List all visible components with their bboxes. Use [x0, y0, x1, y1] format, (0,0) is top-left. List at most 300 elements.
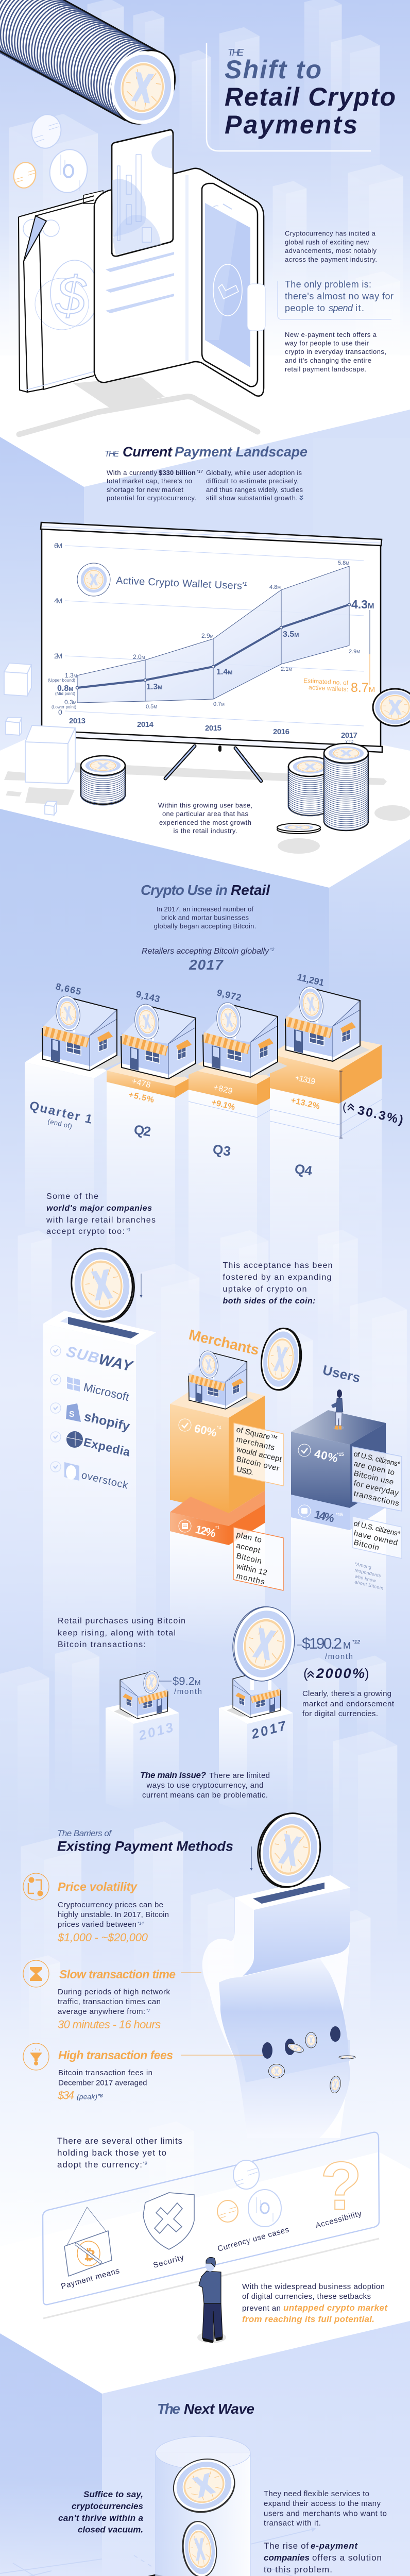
chart value labels: 2.1M	[281, 666, 292, 672]
callout: open to bitcoin: Bitcoin use	[353, 1469, 395, 1487]
quarter growth labels: +1319	[294, 1073, 316, 1087]
heading: the next wave: Next Wave	[184, 2401, 254, 2417]
total growth bracket: (	[343, 1100, 347, 1113]
text: major companies: world's major companies	[46, 1204, 152, 1213]
text: retail purchases: keep rising, along with total	[58, 1629, 176, 1637]
chart value labels: 3.5M	[283, 630, 299, 639]
landscape intro columns: difficult to estimate precisely,	[206, 477, 299, 485]
text: main issue: current means can be problematic.	[142, 1791, 268, 1800]
callout: the only problem: The only problem is:	[285, 279, 371, 290]
Q2 column	[107, 1051, 189, 1288]
coin stacks	[81, 743, 368, 834]
text: both sides of the coin	[223, 1261, 333, 1306]
purchases 2017: 2017	[249, 1718, 288, 1742]
coin dropping into slot	[67, 1244, 139, 1326]
logo: Subway: SUB	[64, 1344, 100, 1367]
purchases 2017: $190.2	[302, 1635, 342, 1652]
caption: growing user base: one particular area that has	[162, 810, 248, 818]
retailer counts	[55, 972, 325, 1004]
retailer counts: 9,972	[216, 987, 242, 1003]
chart gridlines and axis labels: 6M	[54, 541, 62, 550]
year axis labels	[69, 717, 357, 744]
section heading: current payment landscape	[105, 444, 308, 460]
stat: 60%	[179, 1419, 221, 1439]
panel: limits	[43, 2132, 379, 2304]
barrier: price volatility: $1,000 - ~$20,000	[57, 1931, 148, 1944]
coins in cylinder	[166, 2451, 242, 2520]
text: other limits: holding back those yet to	[57, 2148, 166, 2158]
barrier: slow transaction time: During periods of high network	[58, 1988, 170, 1996]
wallet pages: $	[55, 266, 87, 326]
callout: the only problem: there's almost no way for	[285, 291, 394, 301]
retailers chart title: *2	[270, 947, 275, 952]
merchants label: Merchants	[187, 1327, 261, 1358]
logo: Subway: WAY	[97, 1351, 135, 1375]
purchases 2017: 2000%	[316, 1666, 365, 1681]
retailers chart title	[142, 947, 275, 973]
title block: THE	[228, 47, 244, 58]
chart value labels: 0.3M	[64, 699, 77, 706]
quarter labels	[28, 1099, 314, 1179]
callout: the only problem	[278, 279, 394, 319]
text: major companies: with large retail branches	[46, 1216, 156, 1225]
text: main issue: There are limited	[209, 1771, 270, 1780]
text: untapped crypto market: from reaching its full potential.	[242, 2314, 374, 2324]
chart screen	[41, 522, 382, 752]
Q4 column	[270, 1030, 382, 1329]
barrier: price volatility: Price volatility	[58, 1880, 138, 1893]
text: both sides of the coin: uptake of crypto on	[223, 1285, 307, 1294]
receipt illustration	[202, 1807, 355, 2138]
central coin	[258, 1326, 305, 1393]
chart title and coin badge: Active Crypto Wallet Users	[116, 575, 243, 592]
retailer counts: 9,143	[135, 989, 161, 1004]
stat: 60%: 60%	[193, 1422, 218, 1439]
chart value labels: 4.3M	[351, 598, 374, 611]
text: e-payment companies: offers a solution	[312, 2553, 382, 2563]
text: untapped crypto market	[242, 2282, 388, 2324]
text: untapped crypto market: untapped crypto market	[283, 2303, 388, 2313]
third floor and lower walls	[0, 2318, 410, 2576]
panel: users	[291, 1362, 402, 1649]
barrier: high transaction fees: *8	[98, 2093, 103, 2099]
hero illustration: coin roll, wallet, phone and card	[0, 0, 265, 434]
logo: Overstock	[50, 1462, 129, 1492]
barrier: high transaction fees: (peak)	[77, 2093, 97, 2101]
logo: Subway	[50, 1344, 135, 1375]
panel: merchants	[170, 1326, 305, 1649]
retail intro	[154, 905, 256, 930]
heading: barriers: Existing Payment Methods	[57, 1838, 233, 1854]
landscape intro columns: still show substantial growth.	[206, 494, 298, 502]
stat: 14%: 14%	[313, 1508, 335, 1525]
shadow	[19, 377, 258, 434]
floor platform	[0, 670, 410, 888]
text: untapped crypto market: prevent an	[242, 2304, 281, 2313]
text: closed vacuum: closed vacuum.	[78, 2524, 143, 2535]
chart value labels: 4.8M	[269, 584, 281, 590]
logo: Expedia	[50, 1431, 132, 1459]
callout: square merchants	[234, 1423, 283, 1486]
year axis labels: 2015	[205, 724, 221, 733]
receipt ribbon	[202, 1875, 350, 2138]
title block: Payments	[225, 110, 357, 139]
callout: owned bitcoin	[352, 1516, 402, 1558]
chart value labels: 5.8M	[338, 560, 349, 566]
phone with glass cylinder	[90, 2436, 323, 2576]
item: security	[143, 2193, 194, 2270]
barrier: slow transaction time: 30 minutes - 16 hours	[58, 2018, 161, 2031]
caption: growing user base: Within this growing user base,	[158, 802, 252, 809]
logo: Shopify: S	[69, 1410, 75, 1419]
footnote: respondents: about Bitcoin	[354, 1579, 384, 1591]
barrier: slow transaction time: *7	[146, 2008, 150, 2013]
total growth bracket	[339, 1071, 404, 1138]
orange column	[170, 1381, 265, 1545]
callout: square merchants: Bitcoin over	[235, 1454, 280, 1473]
callout: open to bitcoin	[352, 1447, 402, 1511]
landscape intro columns	[107, 469, 303, 502]
barrier: slow transaction time	[23, 1960, 201, 2031]
purchases 2017: (	[303, 1666, 308, 1681]
line chart	[76, 566, 351, 703]
text: e-payment companies: The rise of	[264, 2541, 309, 2551]
quarter labels: Q4	[294, 1161, 314, 1179]
estimated wallets callout: Estimated no. of	[303, 677, 349, 687]
barrier: slow transaction time: traffic, transaction times can	[58, 1997, 161, 2006]
year axis labels: 2013	[69, 717, 86, 725]
text: growing market: for digital currencies.	[302, 1709, 378, 1718]
e-payment paragraph: way for people to use their	[284, 339, 369, 347]
estimated wallets callout	[303, 610, 375, 695]
circuit lines	[0, 2529, 403, 2576]
text: retail purchases: Bitcoin transactions:	[58, 1640, 146, 1649]
heading: the next wave: The	[157, 2401, 180, 2417]
merchant store	[189, 1350, 254, 1409]
intro paragraph	[285, 230, 377, 263]
callout: plan to accept	[233, 1527, 283, 1590]
arrow	[141, 1274, 142, 1297]
users label: Users	[321, 1362, 362, 1385]
e-payment paragraph: New e-payment tech offers a	[285, 331, 377, 338]
purchases 2017: )	[365, 1666, 369, 1681]
callout: the only problem: it.	[355, 303, 364, 313]
item: payment means	[60, 2207, 121, 2291]
logo: Overstock: overstock	[80, 1469, 129, 1492]
screen stand legs	[165, 746, 261, 781]
glass cylinder	[156, 2436, 250, 2576]
caption: growing user base: experienced the most growth	[159, 819, 251, 826]
text: e-payment companies: companies	[264, 2553, 310, 2563]
stat: 14%: *15	[336, 1512, 343, 1517]
landscape intro columns: total market cap, there's no	[107, 477, 192, 485]
Q1 column	[25, 1042, 107, 1236]
intro paragraph: global rush of exciting new	[285, 238, 369, 246]
chart value labels: 2.9M	[201, 632, 214, 639]
text: main issue: ways to use cryptocurrency, and	[146, 1781, 264, 1790]
chart value labels: 0.8M	[57, 684, 73, 693]
barrier: slow transaction time: Slow transaction time	[59, 1968, 176, 1981]
barrier: slow transaction time: average anywhere from:	[58, 2007, 145, 2016]
footnote: respondents: *Among	[354, 1561, 372, 1570]
man figure	[197, 2257, 226, 2343]
retailer counts: 11,291	[296, 972, 325, 988]
text: both sides of the coin: both sides of the coin:	[223, 1297, 315, 1306]
purchases 2013	[106, 1670, 202, 1814]
gray floor line	[43, 2239, 379, 2318]
e-payment paragraph: retail payment landscape.	[285, 365, 366, 373]
text: flexible services: They need flexible services to	[264, 2489, 369, 2498]
callout: plan to accept: within 12	[235, 1562, 268, 1578]
room walls	[0, 437, 84, 757]
text: closed vacuum: cryptocurrencies	[72, 2501, 143, 2511]
chart gridlines and axis labels: 2M	[54, 652, 62, 660]
purchases 2017: M	[343, 1640, 351, 1651]
barrier: price volatility: *14	[138, 1921, 144, 1926]
quarter labels: Quarter 1	[28, 1099, 94, 1127]
barrier: price volatility: Cryptocurrency prices can be	[58, 1901, 163, 1909]
page background: hero section	[0, 0, 410, 464]
chart value labels: 0.5M	[146, 704, 157, 710]
quarter labels: (end of)	[47, 1117, 73, 1130]
callout: owned bitcoin: Bitcoin	[353, 1538, 380, 1552]
purchases 2013: 2013	[136, 1719, 175, 1743]
chart value labels	[48, 560, 374, 710]
text: other limits	[57, 2136, 182, 2170]
text: other limits: There are several other limits	[57, 2136, 182, 2146]
purchases 2017	[219, 1601, 369, 1814]
footnote: respondents: who know	[354, 1573, 377, 1584]
section heading: current payment landscape: Payment Landscape	[175, 444, 308, 460]
stat: 40%: 40%	[313, 1447, 339, 1465]
callout: plan to accept: plan to	[235, 1530, 263, 1545]
chart value labels: 2.0M	[133, 653, 145, 660]
heading: barriers	[57, 1828, 233, 1854]
item: currency use cases	[217, 2160, 290, 2253]
retailers chart title: Retailers accepting Bitcoin globally	[142, 947, 269, 956]
landscape intro columns: $330 billion	[159, 469, 196, 477]
callout: plan to accept: months	[235, 1571, 265, 1586]
quarterly retailer columns	[25, 972, 404, 1329]
quarter labels: Q3	[212, 1141, 232, 1159]
text: retail purchases	[58, 1617, 185, 1649]
text: untapped crypto market: of digital currencies, these setbacks	[242, 2292, 371, 2301]
text: closed vacuum	[58, 2489, 143, 2535]
coin dropping into receipt slot	[251, 1807, 327, 1893]
text: growing market: Clearly, there's a growing	[302, 1689, 391, 1698]
wallet body	[94, 168, 264, 396]
year axis labels: 2017	[341, 731, 357, 740]
chart value labels: (Lower point)	[52, 705, 76, 709]
dark column	[291, 1410, 386, 1530]
retail intro: globally began accepting Bitcoin.	[154, 922, 256, 930]
credit card	[112, 130, 173, 256]
quarter growth labels: +829	[213, 1083, 233, 1096]
barrier: high transaction fees: Bitcoin transaction fees in	[58, 2069, 152, 2077]
stat: 60%: *4	[217, 1425, 221, 1430]
purchases 2017: *12	[352, 1639, 360, 1645]
title block	[207, 43, 396, 151]
text: main issue	[140, 1770, 270, 1800]
wallet slots	[106, 252, 174, 313]
chart title and coin badge	[77, 563, 247, 596]
landscape intro columns: shortage for new market	[107, 486, 183, 494]
text: untapped crypto market: With the widespread business adoption	[242, 2282, 385, 2291]
logo: Shopify	[50, 1403, 131, 1434]
text: both sides of the coin: fostered by an expanding	[223, 1273, 332, 1282]
retail intro: In 2017, an increased number of	[157, 905, 253, 913]
chart title and coin badge: *1	[242, 582, 247, 587]
barrier: price volatility: highly unstable. In 2017, Bitcoin	[58, 1910, 169, 1919]
retailers chart title: 2017	[189, 957, 224, 973]
item: payment means: ₿	[84, 2247, 96, 2263]
floor boxes	[4, 663, 75, 815]
stat: 12%: 12%	[194, 1523, 217, 1540]
text: e-payment companies: to this problem.	[264, 2565, 332, 2574]
logo: Shopify: shopify	[83, 1410, 131, 1434]
logo: Microsoft	[50, 1375, 130, 1403]
phone	[90, 2575, 323, 2576]
quarter growth labels: +5.5%	[128, 1090, 155, 1105]
floating coins	[11, 111, 91, 196]
text: e-payment companies: e-payment	[311, 2541, 358, 2551]
logo: Expedia: Expedia	[82, 1435, 132, 1459]
chart value labels: 0.7M	[213, 701, 225, 707]
barrier: price volatility: prices varied between	[58, 1920, 136, 1929]
callout: open to bitcoin: for everyday	[353, 1479, 400, 1498]
text: closed vacuum: can't thrive within a	[58, 2513, 143, 2523]
woman figure	[331, 1389, 344, 1430]
landscape intro columns: *17	[197, 469, 203, 474]
barrier: high transaction fees: High transaction fees	[58, 2048, 173, 2062]
section heading: crypto use in retail: Crypto Use in	[141, 882, 228, 898]
text: closed vacuum: Suffice to say,	[83, 2489, 143, 2499]
section heading: current payment landscape: THE	[105, 450, 119, 459]
heading: barriers: The Barriers of	[57, 1828, 112, 1838]
footnote: respondents: respondents	[354, 1567, 382, 1579]
text: other limits: adopt the currency:	[57, 2160, 142, 2170]
falling coins	[262, 2026, 355, 2094]
item: security: Security	[152, 2253, 185, 2270]
callout: open to bitcoin: of U.S. citizens*	[353, 1449, 401, 1468]
chart gridlines and axis labels: 0	[58, 708, 62, 716]
callout: open to bitcoin: are open to	[353, 1459, 396, 1477]
wallet pages	[19, 191, 103, 392]
quarter growth labels	[128, 1073, 320, 1112]
coin roll	[0, 0, 186, 133]
text: major companies: *3	[126, 1228, 130, 1232]
stat: 40%: *15	[337, 1452, 344, 1457]
text: flexible services: transact with it.	[264, 2519, 321, 2528]
text: main issue: The main issue?	[140, 1770, 207, 1780]
chart value labels: (Upper bound)	[48, 678, 75, 683]
landscape intro columns: and thus ranges widely, studies	[206, 486, 303, 494]
footnote: respondents	[354, 1561, 384, 1591]
caption: growing user base: is the retail industry.	[173, 827, 237, 835]
quarter growth labels: +478	[131, 1077, 151, 1090]
text: major companies: Some of the	[46, 1192, 98, 1201]
floor shadows	[4, 762, 410, 854]
purchases 2013: $9.2M	[173, 1674, 201, 1688]
retailer counts: 8,665	[55, 981, 82, 997]
stat: 40%	[298, 1444, 344, 1465]
item: accessibility: Accessibility	[315, 2209, 363, 2230]
chart value labels: 1.3M	[146, 683, 162, 691]
callout: the only problem: spend	[329, 303, 353, 313]
callout: square merchants: would accept	[235, 1445, 283, 1464]
stat: 14%	[298, 1505, 343, 1525]
callout: owned bitcoin: have owned	[353, 1529, 399, 1547]
section heading: crypto use in retail: Retail	[231, 882, 270, 898]
barrier: high transaction fees	[23, 2043, 263, 2102]
quarter labels: Q2	[133, 1122, 152, 1140]
caption: growing user base	[158, 802, 252, 835]
barrier: high transaction fees: December 2017 averaged	[58, 2078, 147, 2088]
callout: owned bitcoin: of U.S. citizens*	[353, 1519, 401, 1538]
landscape intro columns: With a currently	[107, 469, 158, 477]
callout: open to bitcoin: transactions	[353, 1489, 400, 1508]
chart value labels: 1.3M	[65, 672, 77, 679]
Q3 column	[189, 1051, 270, 1309]
section heading: crypto use in retail	[141, 882, 270, 898]
item: currency use cases: Currency use cases	[217, 2225, 290, 2253]
callout: square merchants: USD.	[235, 1465, 254, 1478]
stat: 12%	[179, 1520, 220, 1540]
year axis labels: 2014	[137, 720, 154, 729]
estimated wallets callout: 8.7M	[351, 681, 375, 695]
text: both sides of the coin: This acceptance has been	[223, 1261, 333, 1270]
chart value labels: 1.4M	[216, 668, 232, 676]
title block: Shift to	[225, 55, 321, 84]
chart gridlines and axis labels	[54, 541, 364, 726]
text: major companies	[46, 1192, 156, 1236]
callout: plan to accept: Bitcoin	[235, 1551, 263, 1566]
callout: plan to accept: accept	[235, 1541, 262, 1555]
estimated wallets callout: active wallets:	[309, 684, 348, 693]
purchases 2017: /month	[325, 1652, 353, 1661]
e-payment paragraph: crypto in everyday transactions,	[285, 348, 386, 355]
title block: Retail Crypto	[225, 82, 396, 111]
purchases 2013: /month	[174, 1687, 202, 1696]
e-payment paragraph: and it's changing the entire	[285, 357, 371, 364]
logo: Microsoft: Microsoft	[82, 1381, 130, 1403]
background: mid section walls	[0, 809, 410, 2336]
text: flexible services	[264, 2489, 387, 2528]
text: flexible services: users and merchants who want to	[264, 2509, 387, 2518]
total growth bracket: 30.3%)	[356, 1104, 404, 1127]
stores	[42, 985, 370, 1079]
text: flexible services: expand their access to the many	[264, 2499, 381, 2508]
phone on wallet	[202, 183, 265, 386]
barrier: high transaction fees: $34	[57, 2089, 74, 2102]
retail intro: brick and mortar businesses	[161, 914, 249, 921]
company logo column	[43, 1244, 156, 1690]
chart gridlines and axis labels: 4M	[54, 597, 62, 605]
chart value labels: 2.9M	[349, 649, 360, 655]
screen bottom bar	[76, 732, 382, 752]
text: other limits: *9	[143, 2161, 147, 2166]
stat: 12%: *1	[215, 1525, 220, 1530]
callout: square merchants: merchants	[235, 1435, 276, 1452]
text: growing market: market and endorsement	[302, 1700, 395, 1708]
section heading: current payment landscape: Current	[123, 444, 173, 460]
quarter growth labels: +9.1%	[211, 1098, 236, 1112]
text: growing market	[302, 1689, 395, 1718]
item: payment means: Payment means	[60, 2266, 121, 2291]
receipt slot	[235, 1875, 350, 1910]
item: accessibility: ?	[320, 2148, 362, 2224]
quarter growth labels: +13.2%	[290, 1096, 320, 1111]
